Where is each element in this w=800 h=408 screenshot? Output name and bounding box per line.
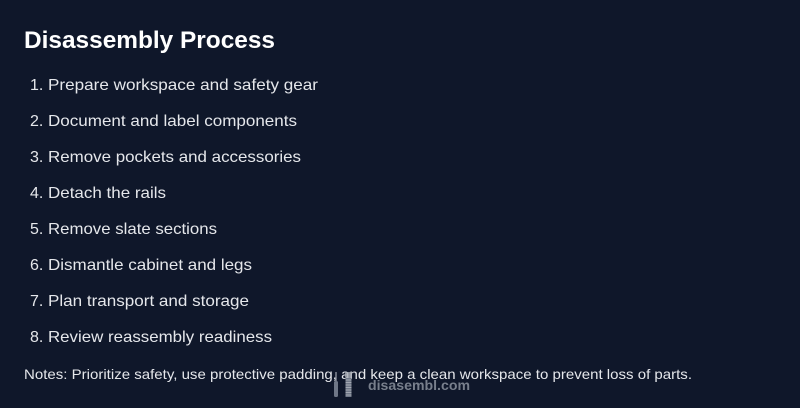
step 5: Remove slate sections: [48, 221, 217, 238]
step 4: 4.: [30, 185, 43, 202]
watermark logo icon: screwdriver and bolt: [334, 372, 352, 397]
step 6: 6.: [30, 257, 43, 274]
step 5: 5.: [30, 221, 43, 238]
notes text: Notes: Prioritize safety, use protective padding, and keep a clean workspace to prevent loss of parts.: [24, 366, 692, 382]
step 1: Prepare workspace and safety gear: [48, 77, 319, 94]
step 2: Document and label components: [48, 113, 297, 130]
step 1: 1.: [30, 77, 43, 94]
step 8: Review reassembly readiness: [48, 329, 272, 346]
title: Disassembly Process: [24, 27, 275, 54]
step 6: Dismantle cabinet and legs: [48, 257, 252, 274]
bolt: [345, 372, 352, 397]
step 2: 2.: [30, 113, 43, 130]
step 7: 7.: [30, 293, 43, 310]
step 4: Detach the rails: [48, 185, 166, 202]
step 8: 8.: [30, 329, 43, 346]
process steps list: [30, 77, 319, 346]
step 7: Plan transport and storage: [48, 293, 249, 310]
screwdriver: [334, 372, 338, 397]
step 3: 3.: [30, 149, 43, 166]
watermark text: disasembl.com: [368, 377, 470, 393]
step 3: Remove pockets and accessories: [48, 149, 301, 166]
